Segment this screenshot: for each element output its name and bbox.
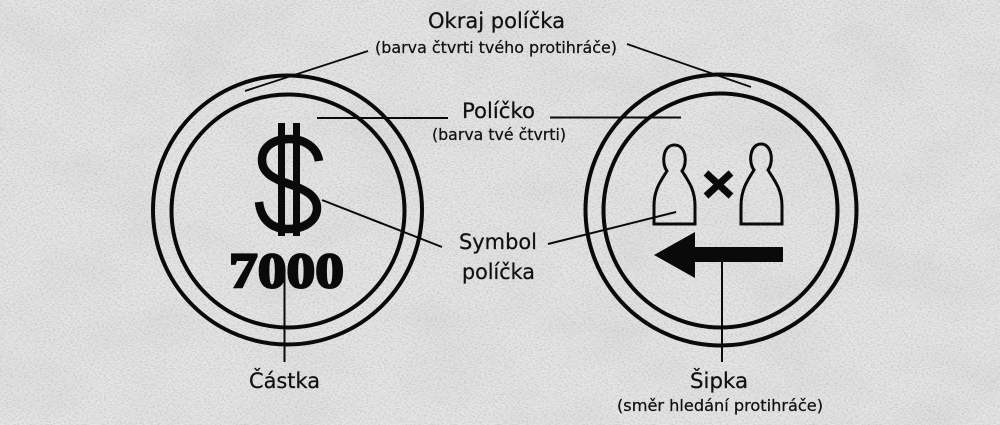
heading: Políčko: [432, 99, 566, 144]
leader lines: [245, 44, 751, 362]
heading: Okraj políčka: Okraj políčka: [428, 9, 565, 33]
label: Symbol políčka: Symbol: [459, 230, 537, 254]
heading: Okraj políčka: (barva čtvrti tvého protihráče): [375, 38, 617, 57]
right field outer border: [586, 74, 856, 346]
label: Šipka: (směr hledání protihráče): [617, 396, 823, 415]
panel: right field diagram: [586, 74, 856, 346]
label: Částka: Částka: [249, 368, 320, 393]
heading: Políčko: Políčko: [462, 99, 535, 123]
icon: dollar symbol: [259, 123, 319, 236]
icon: right pawn: [741, 144, 782, 224]
label: Symbol políčka: [459, 230, 537, 284]
icon: left pawn: [654, 145, 695, 224]
right field inner circle: [604, 94, 838, 328]
label: Šipka: Šipka: [690, 368, 748, 393]
icon: cross: [706, 173, 731, 196]
left field outer border: [153, 76, 422, 344]
icon: left arrow: [654, 232, 783, 278]
panel: left field diagram: [153, 76, 422, 344]
amount 7000: 7000: [229, 242, 344, 298]
label: Symbol políčka: políčka: [462, 260, 535, 284]
label: Šipka: [617, 368, 823, 415]
heading: Okraj políčka: [375, 9, 617, 57]
heading: Políčko: (barva tvé čtvrti): [432, 125, 566, 144]
left field inner circle: [172, 94, 404, 328]
